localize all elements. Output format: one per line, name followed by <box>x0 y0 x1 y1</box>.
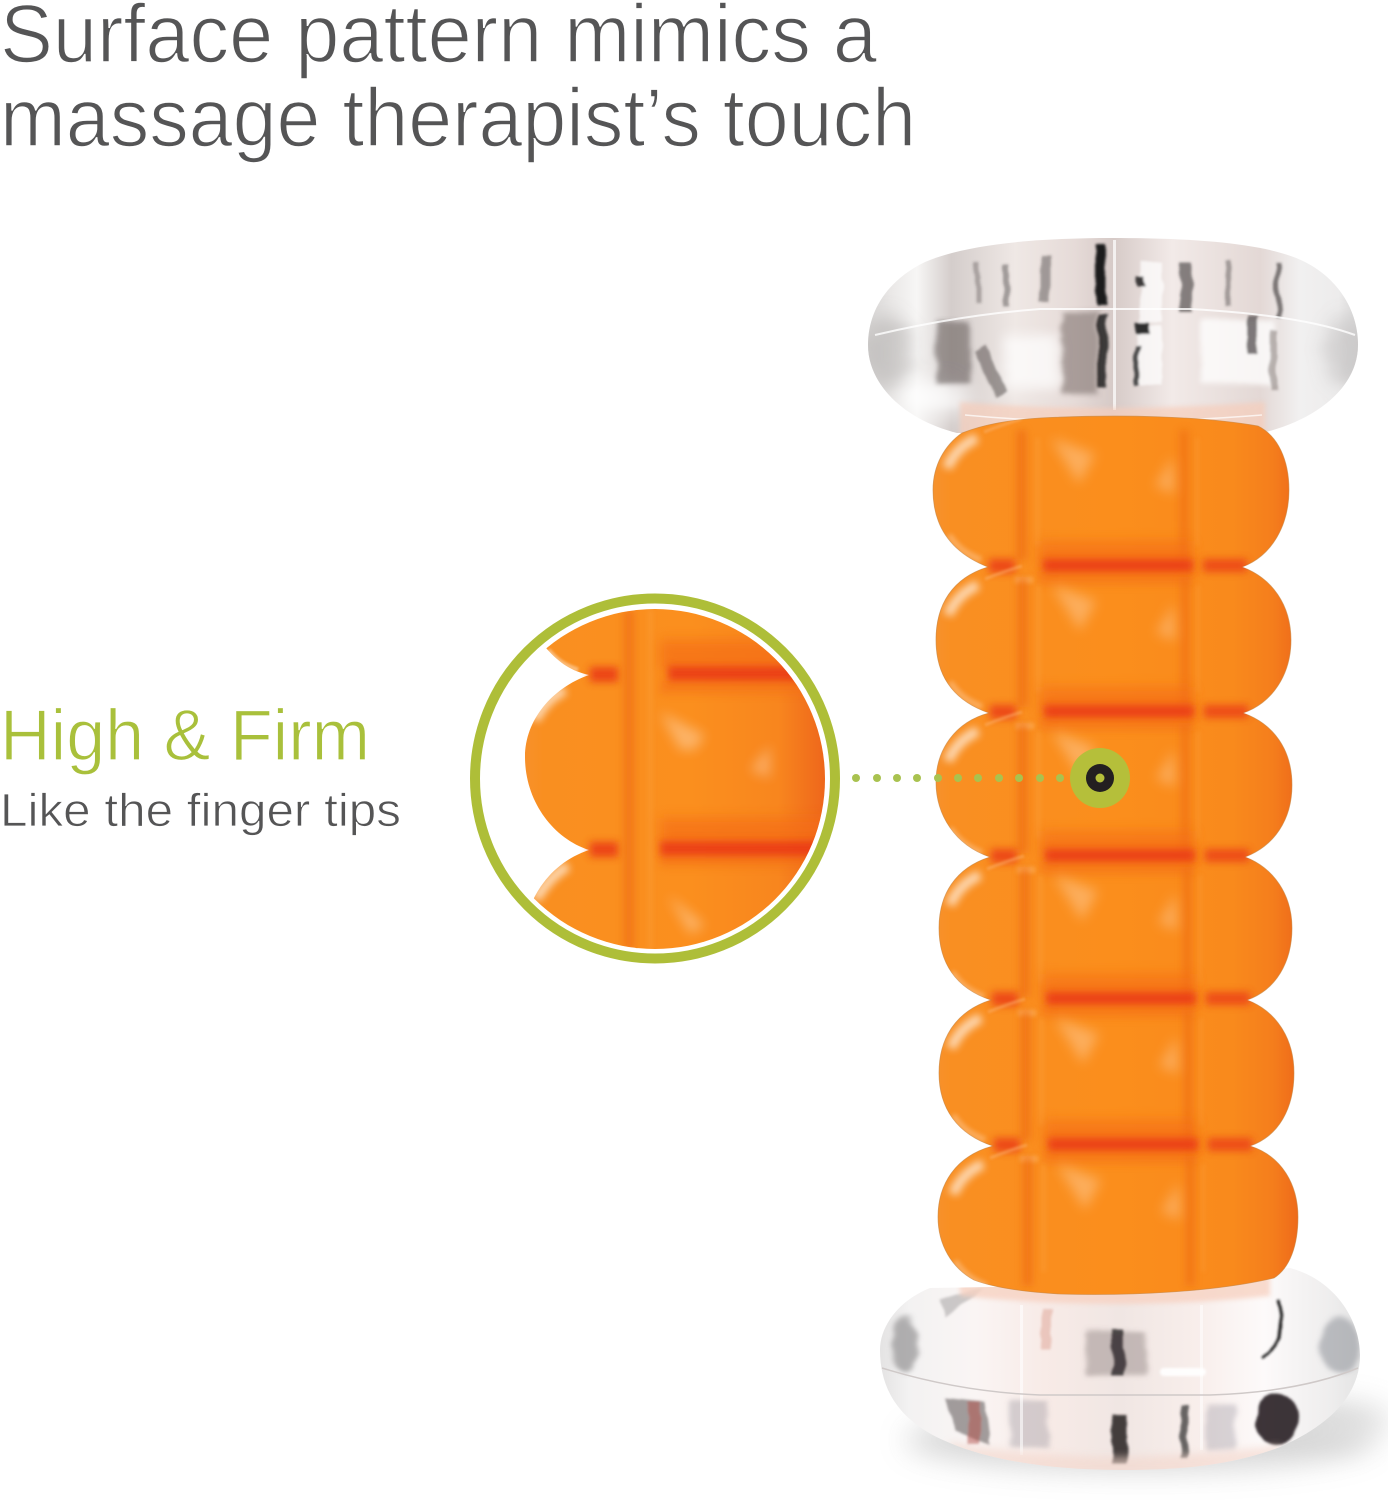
ground shadow <box>905 1402 1388 1470</box>
focus marker on roller <box>1070 748 1130 808</box>
orange massage body <box>933 416 1298 1294</box>
callout heading: High & Firm <box>0 696 370 776</box>
green ring <box>475 598 835 958</box>
title <box>0 0 916 164</box>
dotted connector <box>852 774 1064 782</box>
bottom clear end cap <box>870 1262 1370 1477</box>
surface pattern grooves and highlights <box>947 419 1252 1286</box>
title: massage therapist’s touch <box>0 71 916 164</box>
magnified detail circle <box>475 590 840 970</box>
foot roller product <box>860 230 1388 1477</box>
callout subtext: Like the finger tips <box>0 784 401 836</box>
magnified orange surface <box>525 590 840 970</box>
callout text: high and firm <box>0 696 401 836</box>
top clear end cap <box>860 230 1370 440</box>
